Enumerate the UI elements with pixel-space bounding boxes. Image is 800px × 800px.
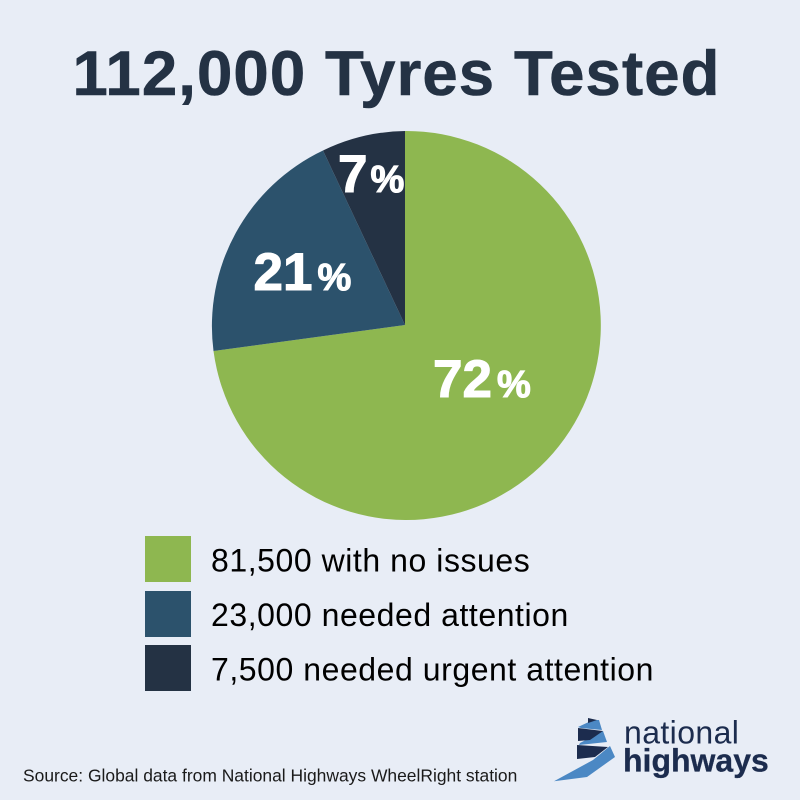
pie slice: 21% needed attention [212,150,405,351]
pie slice: 72% no issues [214,131,601,520]
logo wordmark: highways [623,742,769,778]
legend text: urgent attention: 7,500 needed urgent attention [211,652,654,688]
legend text: needed attention: 23,000 needed attention [211,597,569,633]
label: 21%: 21% [254,243,351,302]
legend swatch: urgent attention [145,645,191,691]
logo wordmark [623,714,769,778]
legend [145,536,654,691]
logo icon [554,718,615,781]
label: 7%: 7% [338,145,404,204]
pie slice: 7% needed urgent attention [323,131,405,325]
legend text: no issues: 81,500 with no issues [211,542,530,578]
title: 112,000 Tyres Tested [72,39,721,109]
logo wordmark: national [624,714,739,750]
logo: National Highways [554,714,769,781]
legend swatch: no issues [145,536,191,582]
source note: Source: Global data from National Highways WheelRight station [23,766,517,786]
pie chart [212,131,601,520]
legend swatch: needed attention [145,591,191,637]
label: 72%: 72% [433,350,531,409]
